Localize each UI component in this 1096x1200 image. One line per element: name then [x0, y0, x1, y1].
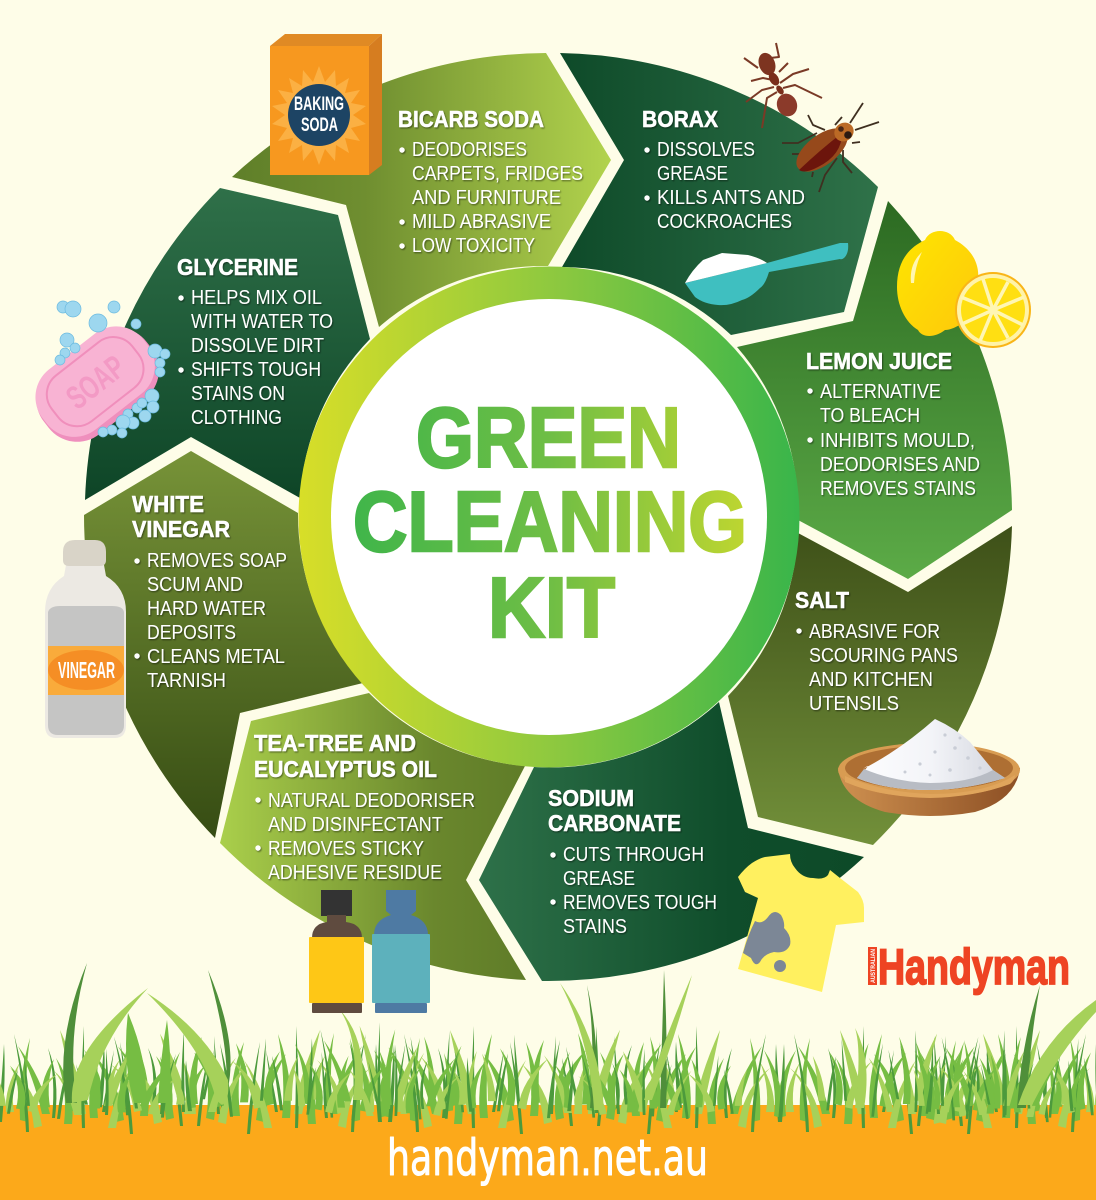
- text: white vinegar points: TARNISH: [147, 669, 226, 692]
- panel: white vinegar: [84, 451, 363, 838]
- icon: salt bowl: [838, 719, 1020, 816]
- text: glycerine points: STAINS ON: [191, 382, 285, 405]
- text: borax points: KILLS ANTS AND: [657, 186, 805, 209]
- text: glycerine points: HELPS MIX OIL: [191, 286, 322, 309]
- text: lemon juice points: DEODORISES AND: [820, 453, 980, 476]
- text: bicarb soda points: MILD ABRASIVE: [412, 210, 551, 233]
- text: glycerine points: SHIFTS TOUGH: [191, 358, 321, 381]
- heading: sodium carbonate: CARBONATE: [548, 810, 681, 836]
- panel: tea-tree and eucalyptus oil: [220, 693, 526, 980]
- blue bottle: [372, 890, 430, 1013]
- text: glycerine points: DISSOLVE DIRT: [191, 334, 324, 357]
- icon: baking soda box: [270, 34, 382, 175]
- icon: vinegar bottle: [45, 540, 126, 738]
- heading: white vinegar: [132, 491, 230, 542]
- heading: glycerine: GLYCERINE: [177, 254, 298, 280]
- text: white vinegar points: CLEANS METAL: [147, 645, 285, 668]
- orange ground band: [0, 1105, 1096, 1200]
- icon: baking soda box: BAKING: [294, 94, 344, 115]
- text: glycerine points: WITH WATER TO: [191, 310, 333, 333]
- heading: tea-tree and eucalyptus oil: TEA-TREE AND: [254, 730, 416, 756]
- grass: [0, 963, 1096, 1134]
- text: lemon juice points: [807, 380, 980, 500]
- soap bar: SOAP: [59, 348, 132, 416]
- title: KIT: [488, 561, 615, 656]
- heading: tea-tree and eucalyptus oil: EUCALYPTUS OIL: [254, 756, 437, 782]
- icon: cockroach: [782, 103, 879, 192]
- heading: borax: BORAX: [642, 106, 719, 132]
- text: salt points: [796, 620, 958, 715]
- panel: bicarb soda: [232, 53, 611, 327]
- heading: sodium carbonate: [548, 785, 681, 836]
- title: GREEN: [416, 391, 681, 486]
- text: salt points: UTENSILS: [809, 692, 899, 715]
- icon: essential oil bottles: [309, 890, 430, 1013]
- icon: vinegar bottle: VINEGAR: [58, 657, 115, 683]
- heading: white vinegar: WHITE: [132, 491, 204, 517]
- panel: glycerine: [85, 188, 370, 500]
- brown bottle: [309, 890, 364, 1013]
- icon: soap with bubbles: [21, 301, 173, 456]
- title: CLEANING: [353, 475, 747, 570]
- text: glycerine points: CLOTHING: [191, 406, 282, 429]
- text: bicarb soda points: LOW TOXICITY: [412, 234, 535, 257]
- icon: baking soda box: SODA: [301, 115, 338, 136]
- icon: stained t-shirt: [738, 854, 864, 992]
- soap bar: [21, 312, 173, 456]
- text: white vinegar points: REMOVES SOAP: [147, 549, 287, 572]
- logo: Handyman: AUSTRALIAN: [870, 949, 877, 983]
- text: bicarb soda points: CARPETS, FRIDGES: [412, 162, 583, 185]
- text: salt points: AND KITCHEN: [809, 668, 933, 691]
- text: white vinegar points: SCUM AND: [147, 573, 243, 596]
- heading: white vinegar: VINEGAR: [132, 516, 230, 542]
- heading: sodium carbonate: SODIUM: [548, 785, 634, 811]
- text: sodium carbonate points: [550, 843, 717, 938]
- text: tea-tree points: AND DISINFECTANT: [268, 813, 443, 836]
- text: tea-tree points: NATURAL DEODORISER: [268, 789, 475, 812]
- text: glycerine points: [178, 286, 333, 429]
- icon: lemon: [897, 231, 1031, 348]
- text: borax points: [644, 138, 805, 233]
- text: salt points: SCOURING PANS: [809, 644, 958, 667]
- text: sodium carbonate points: GREASE: [563, 867, 635, 890]
- text: bicarb soda points: DEODORISES: [412, 138, 527, 161]
- panel: borax: [560, 53, 878, 335]
- icon: measuring scoop: [685, 243, 848, 305]
- text: tea-tree points: [255, 789, 475, 884]
- text: sodium carbonate points: STAINS: [563, 915, 627, 938]
- text: lemon juice points: INHIBITS MOULD,: [820, 429, 975, 452]
- icon: ant: [744, 43, 822, 128]
- text: borax points: GREASE: [657, 162, 728, 185]
- heading: lemon juice: LEMON JUICE: [806, 348, 952, 374]
- text: sodium carbonate points: REMOVES TOUGH: [563, 891, 717, 914]
- text: lemon juice points: TO BLEACH: [820, 404, 920, 427]
- bubbles: [55, 301, 170, 438]
- text: tea-tree points: ADHESIVE RESIDUE: [268, 861, 442, 884]
- text: borax points: COCKROACHES: [657, 210, 792, 233]
- title: [353, 391, 747, 656]
- icon: lemon slice: [955, 272, 1031, 348]
- text: bicarb soda points: [399, 138, 583, 257]
- website url: handyman.net.au: [387, 1129, 708, 1187]
- heading: tea-tree and eucalyptus oil: [254, 730, 437, 782]
- panel: sodium carbonate: [479, 702, 864, 981]
- text: salt points: ABRASIVE FOR: [809, 620, 940, 643]
- text: lemon juice points: REMOVES STAINS: [820, 477, 976, 500]
- heading: bicarb soda: BICARB SODA: [398, 106, 544, 132]
- panel: lemon juice: [737, 201, 1012, 579]
- text: white vinegar points: [134, 549, 287, 692]
- text: white vinegar points: DEPOSITS: [147, 621, 236, 644]
- panel: salt: [728, 526, 1012, 845]
- central ring: [298, 266, 800, 768]
- text: bicarb soda points: AND FURNITURE: [412, 186, 561, 209]
- text: tea-tree points: REMOVES STICKY: [268, 837, 424, 860]
- text: borax points: DISSOLVES: [657, 138, 755, 161]
- central white circle: [331, 299, 767, 735]
- text: lemon juice points: ALTERNATIVE: [820, 380, 941, 403]
- text: sodium carbonate points: CUTS THROUGH: [563, 843, 704, 866]
- heading: salt: SALT: [795, 587, 849, 613]
- text: white vinegar points: HARD WATER: [147, 597, 266, 620]
